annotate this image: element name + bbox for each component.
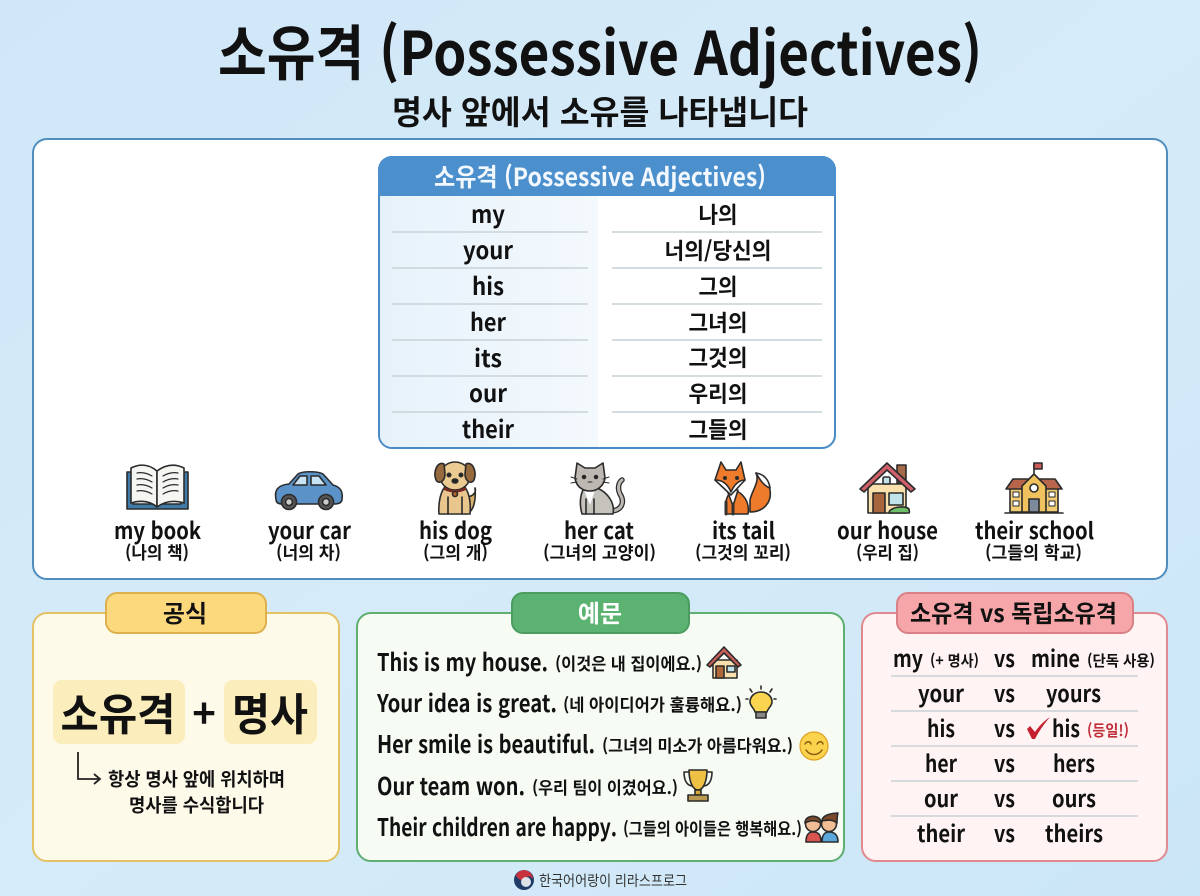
icon: car — [276, 472, 342, 510]
example: her smile: Her smile is beautiful. — [377, 725, 595, 760]
icon: school — [1005, 463, 1063, 513]
label: its tail — [695, 512, 791, 565]
example: our team: (우리 팀이 이겼어요.) — [532, 774, 678, 799]
comparison: our vs ours — [924, 780, 1096, 814]
panel tab: possessive vs independent: 소유격 vs 독립소유격 — [910, 594, 1117, 629]
example: her smile — [377, 725, 828, 760]
panel tab: formula: 공식 — [163, 594, 207, 629]
title: 소유격 (Possessive Adjectives) — [218, 6, 982, 93]
formula note: 명사를 수식합니다 — [129, 792, 264, 818]
comparison: our vs ours: ours — [1052, 780, 1096, 814]
comparison: her vs hers: hers — [1053, 745, 1095, 779]
label: our house: (우리 집) — [856, 540, 919, 565]
label: our house — [837, 512, 938, 565]
icon: dog — [435, 462, 475, 514]
label: your car: (너의 차) — [276, 540, 341, 565]
example: their children: (그들의 아이들은 행복해요.) — [623, 815, 802, 840]
formula note — [108, 766, 285, 818]
comparison: her vs hers: her — [925, 745, 958, 779]
formula equation — [53, 679, 317, 744]
comparison: my vs mine: my — [893, 640, 923, 674]
label: her cat: (그녀의 고양이) — [543, 540, 656, 565]
example: our team: Our team won. — [377, 767, 525, 802]
table column: english: its — [474, 339, 502, 374]
table column: english: our — [469, 374, 507, 409]
subtitle: 명사 앞에서 소유를 나타냅니다 — [392, 86, 808, 134]
table column: korean: 우리의 — [688, 377, 748, 409]
example: their children: Their children are happy. — [377, 808, 617, 843]
label: my book: my book — [114, 512, 201, 546]
table column: korean: 그의 — [698, 270, 738, 302]
example: our team — [377, 767, 712, 802]
comparison: your vs yours — [918, 675, 1101, 709]
table column: english: his — [472, 267, 504, 302]
icon: cat — [571, 463, 622, 514]
comparison: my vs mine: mine — [1031, 640, 1080, 674]
footer logo and credit: 한국어어랑이 리라스프로그 — [539, 870, 687, 891]
comparison: her vs hers — [925, 745, 1095, 779]
label: its tail: (그것의 꼬리) — [695, 540, 791, 565]
label: her cat: her cat — [564, 512, 634, 546]
label: our house: our house — [837, 512, 938, 546]
comparison: her vs hers: vs — [994, 745, 1015, 779]
example: their children — [377, 808, 838, 843]
icon: house — [860, 463, 915, 513]
panel: possessive vs independent — [862, 593, 1167, 861]
comparison: your vs yours: your — [918, 675, 965, 709]
label: his dog: (그의 개) — [423, 540, 488, 565]
arrow: formula note — [78, 752, 100, 784]
comparison: his vs his: his — [927, 710, 955, 744]
comparison: my vs mine — [893, 640, 1155, 674]
comparison: my vs mine: vs — [994, 640, 1015, 674]
example: your idea — [376, 684, 776, 719]
comparison: their vs theirs: theirs — [1045, 815, 1103, 849]
example: your idea: (네 아이디어가 훌륭해요.) — [563, 691, 742, 716]
formula equation: + — [192, 682, 216, 740]
comparison: your vs yours: vs — [994, 675, 1015, 709]
table column: english — [462, 195, 514, 445]
table column: korean: 그들의 — [688, 413, 748, 445]
comparison: his vs his: his — [1052, 710, 1080, 744]
formula equation: 명사 — [232, 679, 308, 743]
table column: korean: 그것의 — [688, 341, 748, 373]
example: my house: This is my house. — [377, 643, 548, 678]
comparison: my vs mine: (단독 사용) — [1087, 650, 1155, 671]
comparison: their vs theirs: vs — [994, 815, 1015, 849]
comparison: his vs his: vs — [994, 710, 1015, 744]
table column: english: their — [462, 410, 514, 445]
table column: english: my — [471, 195, 505, 230]
table column: english: your — [463, 231, 513, 266]
table column: english: her — [470, 303, 506, 338]
comparison: his vs his: (등일!) — [1087, 719, 1129, 741]
panel tab: example sentences — [512, 593, 689, 633]
example: her smile: (그녀의 미소가 아름다워요.) — [602, 732, 793, 757]
label: her cat — [543, 512, 656, 565]
table column: korean — [664, 198, 772, 445]
comparison: your vs yours: yours — [1046, 675, 1101, 709]
table column: korean: 너의/당신의 — [664, 234, 772, 266]
panel: example sentences — [357, 593, 844, 861]
label: my book — [114, 512, 201, 565]
panel tab: example sentences: 예문 — [578, 594, 622, 629]
comparison: their vs theirs — [917, 815, 1103, 849]
label: my book: (나의 책) — [125, 540, 189, 565]
label: his dog: his dog — [419, 512, 492, 546]
example: your idea: Your idea is great. — [376, 684, 557, 719]
label: your car — [268, 512, 352, 565]
formula note: 항상 명사 앞에 위치하며 — [108, 766, 285, 792]
label: his dog — [419, 512, 492, 565]
panel: possessive adjectives overview — [33, 139, 1167, 579]
panel: formula — [33, 593, 339, 861]
example: my house — [377, 643, 741, 678]
table column: korean: 나의 — [698, 198, 738, 230]
label: their school: their school — [975, 512, 1094, 546]
example: my house: (이것은 내 집이에요.) — [555, 650, 702, 675]
comparison: his vs his — [927, 710, 1129, 744]
table header: 소유격 (Possessive Adjectives) — [434, 158, 766, 194]
comparison: our vs ours: our — [924, 780, 959, 814]
table column: korean: 그녀의 — [688, 306, 748, 338]
comparison: our vs ours: vs — [994, 780, 1015, 814]
formula equation: 소유격 — [60, 679, 176, 743]
icon: book — [127, 465, 188, 509]
label: their school — [975, 512, 1094, 565]
comparison: their vs theirs: their — [917, 815, 966, 849]
panel tab: formula — [106, 593, 266, 633]
icon: fox — [715, 462, 770, 514]
comparison: my vs mine: (+ 명사) — [930, 650, 979, 671]
table: possessive adjectives — [378, 156, 836, 448]
label: its tail: its tail — [712, 512, 775, 546]
label: their school: (그들의 학교) — [985, 540, 1082, 565]
label: your car: your car — [268, 512, 352, 546]
